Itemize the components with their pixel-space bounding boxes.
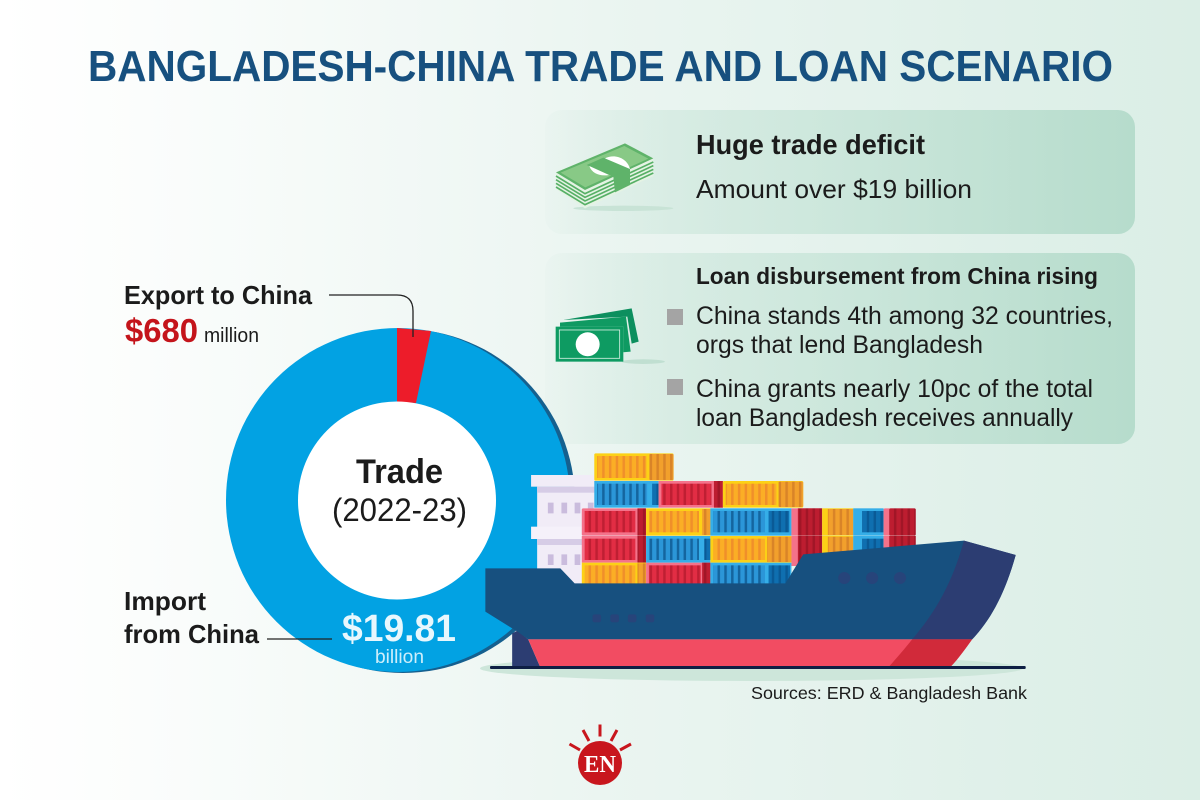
callout: export to China: [124, 280, 413, 349]
center label: (2022-23): [332, 492, 467, 528]
superstructure: [531, 475, 599, 587]
export segment: [397, 328, 431, 403]
heading: loan disbursement: Loan disbursement from China rising: [696, 263, 1098, 289]
icon: stack of banknotes: [556, 143, 673, 211]
import value: $19.81: [342, 608, 456, 650]
callout: import from China: Import: [124, 586, 206, 616]
bullet point one: orgs that lend Bangladesh: [696, 331, 983, 359]
bullet point one: China stands 4th among 32 countries,: [696, 302, 1113, 330]
bullet point two: [667, 375, 1093, 432]
callout: import from China: from China: [124, 619, 260, 649]
bullet point two: China grants nearly 10pc of the total: [696, 375, 1093, 403]
panel: huge trade deficit: [545, 110, 1135, 234]
containers: [582, 453, 916, 584]
title: BANGLADESH-CHINA TRADE AND LOAN SCENARIO: [88, 42, 1113, 91]
callout: export to China: million: [204, 325, 259, 347]
logo: EN: [570, 724, 631, 785]
hull: [485, 541, 1016, 667]
illustration: container ship: [480, 453, 1026, 681]
callout: import from China: [124, 586, 332, 649]
center label: [332, 453, 467, 528]
center label: Trade: [356, 453, 443, 491]
callout: export to China: $680: [125, 312, 198, 349]
import value: [342, 608, 456, 668]
icon: banknotes: [556, 308, 665, 364]
import value: billion: [375, 647, 424, 668]
panel: loan disbursement: [545, 253, 1135, 444]
donut chart: trade: [226, 328, 575, 673]
logo: EN: EN: [584, 752, 617, 778]
bullet point two: loan Bangladesh receives annually: [696, 404, 1073, 432]
heading: huge trade deficit: Huge trade deficit: [696, 129, 925, 160]
callout: export to China: Export to China: [124, 280, 313, 310]
text: amount: Amount over $19 billion: [696, 174, 972, 204]
bullet point one: [667, 302, 1113, 359]
source note: Sources: ERD & Bangladesh Bank: [751, 683, 1027, 703]
